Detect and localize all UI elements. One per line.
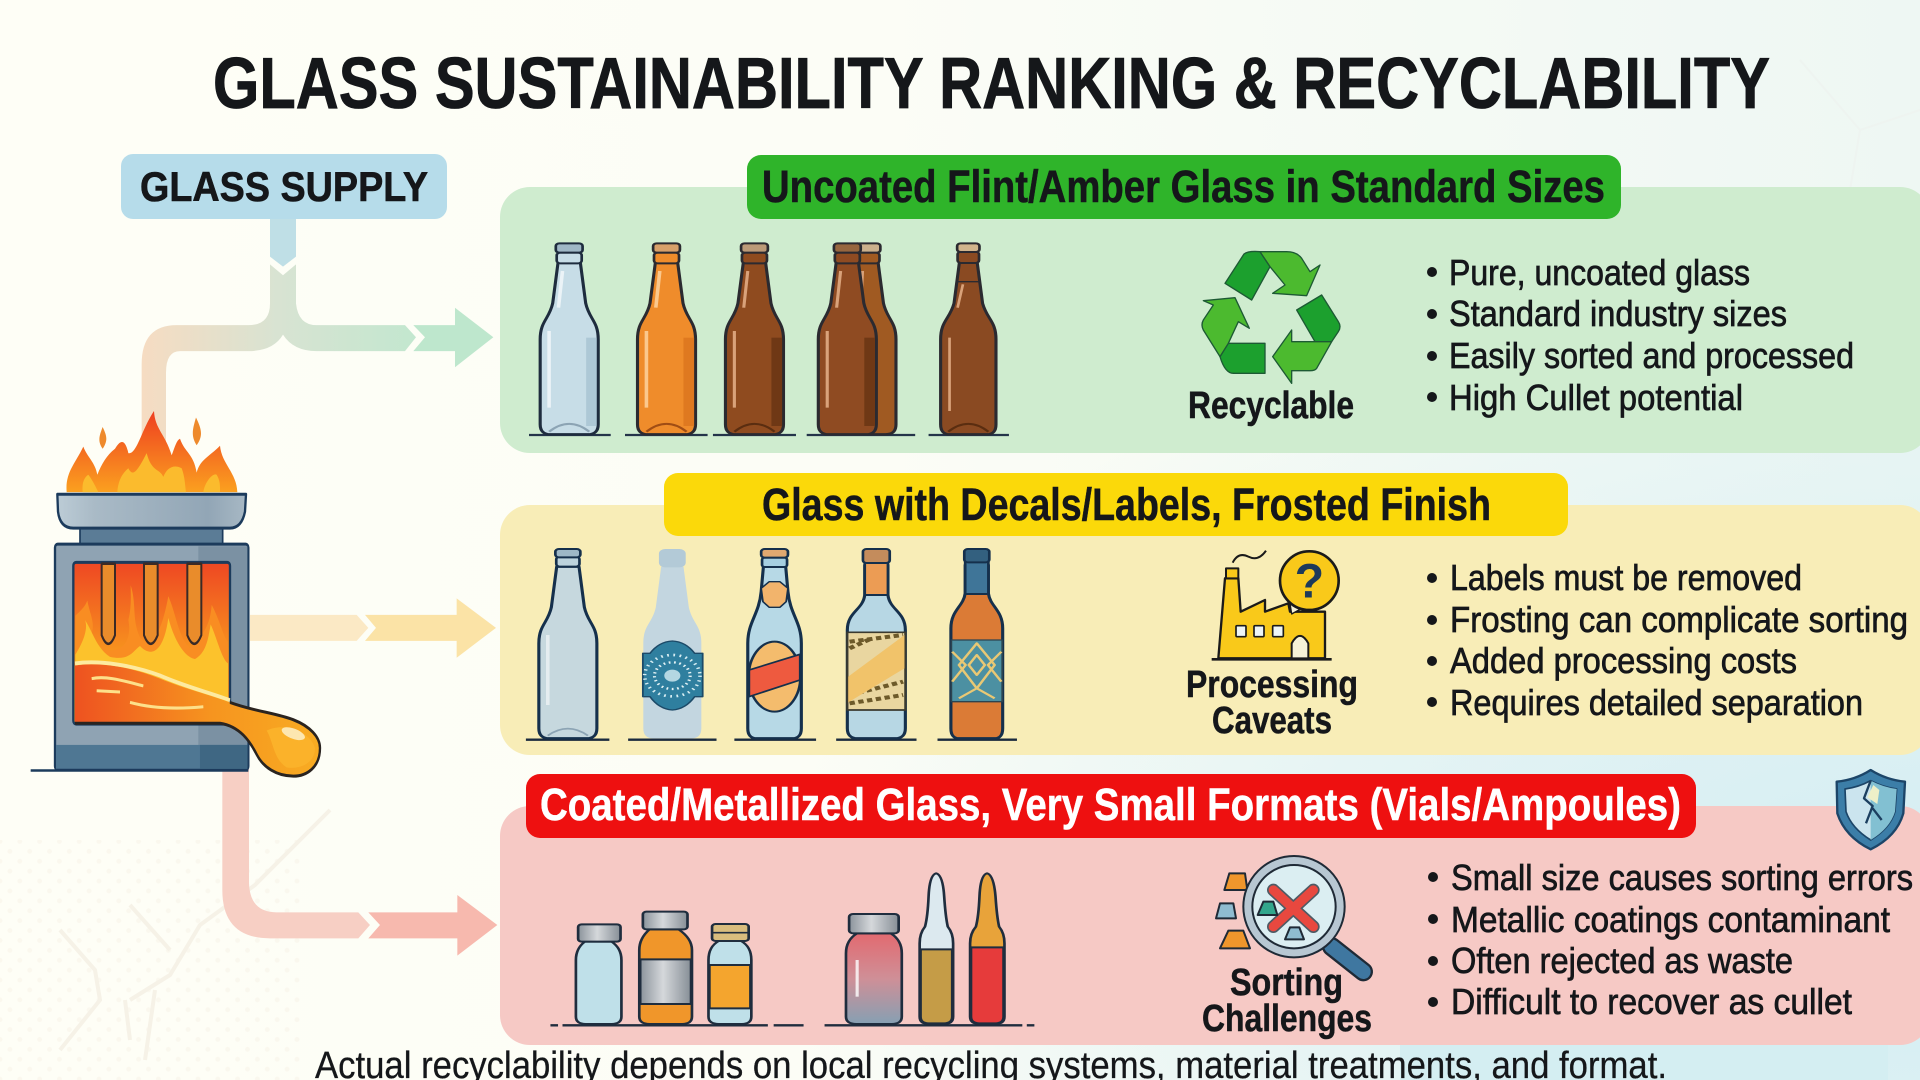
header: green tier bbox=[747, 155, 1621, 219]
header: yellow tier bbox=[664, 473, 1568, 536]
bullets: red tier: Difficult to recover as cullet bbox=[1451, 981, 1852, 1022]
header: red tier: Coated/Metallized Glass, Very Small Formats (Vials/Ampoules) bbox=[540, 779, 1681, 830]
molten glass bbox=[75, 662, 320, 776]
vial: clear with orange band bbox=[708, 924, 751, 1024]
icon: cracked shield bbox=[1837, 770, 1905, 849]
header: green tier: Uncoated Flint/Amber Glass in Standard Sizes bbox=[762, 161, 1605, 212]
vial: clear bbox=[576, 924, 621, 1024]
bottle: clear flint bbox=[540, 243, 598, 434]
bullets: green tier bbox=[1427, 252, 1854, 418]
ampoule: amber and red bbox=[970, 873, 1004, 1024]
icon label: sorting challenges: Challenges bbox=[1202, 998, 1372, 1040]
furnace neck bbox=[80, 528, 223, 545]
bullets: yellow tier: Labels must be removed bbox=[1450, 557, 1802, 598]
glass supply label bbox=[121, 154, 447, 219]
ampoule: clear and amber bbox=[920, 873, 953, 1024]
bullets: yellow tier: Requires detailed separation bbox=[1450, 682, 1863, 723]
icon label: sorting challenges bbox=[1202, 962, 1372, 1040]
header: yellow tier: Glass with Decals/Labels, Frosted Finish bbox=[762, 479, 1491, 530]
furnace chamber with flames bbox=[73, 562, 230, 724]
furnace rods bbox=[102, 564, 201, 644]
flow arrows from supply and furnace bbox=[142, 219, 496, 658]
bottle: clear with orange label and red band bbox=[748, 549, 801, 738]
icon: recycling arrows bbox=[1202, 251, 1340, 383]
furnace illustration bbox=[31, 411, 320, 776]
arrow: supply stem bbox=[270, 219, 296, 267]
icon: factory with question mark bbox=[1212, 551, 1339, 659]
panel: green tier bbox=[500, 155, 1920, 453]
bullets: yellow tier bbox=[1427, 557, 1908, 723]
icon label: sorting challenges: Sorting bbox=[1230, 962, 1343, 1004]
furnace body bbox=[31, 544, 248, 771]
arrow: furnace to red tier bbox=[222, 767, 497, 956]
panel: red tier bbox=[500, 774, 1920, 1080]
bottles: decorated and frosted bbox=[526, 549, 1017, 740]
bottle: plain clear bbox=[539, 549, 597, 738]
bottle: orange amber bbox=[638, 243, 696, 434]
icon label: recyclable: Recyclable bbox=[1188, 385, 1354, 427]
arrow: supply to green tier bbox=[142, 264, 493, 442]
bottle: clear with gold pattern label bbox=[847, 549, 905, 738]
bullets: yellow tier: Added processing costs bbox=[1450, 640, 1797, 681]
icon label: processing caveats bbox=[1186, 664, 1358, 742]
icon label: processing caveats: Processing bbox=[1186, 664, 1358, 706]
panel: yellow tier bbox=[500, 473, 1920, 755]
bullets: red tier: Metallic coatings contaminant bbox=[1451, 899, 1890, 940]
bottle: slim brown bbox=[941, 243, 996, 434]
bullets: green tier: Standard industry sizes bbox=[1449, 293, 1787, 334]
vial: orange with silver band bbox=[639, 912, 692, 1024]
vials and ampoules bbox=[550, 873, 1034, 1025]
bullets: green tier: Easily sorted and processed bbox=[1449, 335, 1854, 376]
bottle: brown amber bbox=[725, 243, 783, 434]
bottle: frosted with teal label bbox=[643, 549, 703, 738]
arrow: furnace to yellow tier bbox=[250, 598, 496, 658]
glass supply label: GLASS SUPPLY bbox=[140, 163, 428, 210]
furnace bowl bbox=[57, 494, 246, 528]
icon: magnifier over cullet bbox=[1216, 856, 1363, 972]
bullets: green tier: Pure, uncoated glass bbox=[1449, 252, 1750, 293]
vial: metallized bbox=[846, 914, 902, 1024]
bottle: orange with teal pattern label bbox=[951, 549, 1003, 738]
icon: top flames bbox=[66, 411, 237, 492]
bullets: green tier: High Cullet potential bbox=[1449, 377, 1743, 418]
bottle pair: brown amber bbox=[818, 243, 896, 434]
bullets: red tier bbox=[1428, 857, 1913, 1022]
bullets: red tier: Often rejected as waste bbox=[1451, 940, 1793, 981]
icon: factory with question mark: ? bbox=[1295, 554, 1324, 608]
icon label: processing caveats: Caveats bbox=[1212, 700, 1332, 742]
bottles: uncoated standard bbox=[529, 243, 1009, 435]
